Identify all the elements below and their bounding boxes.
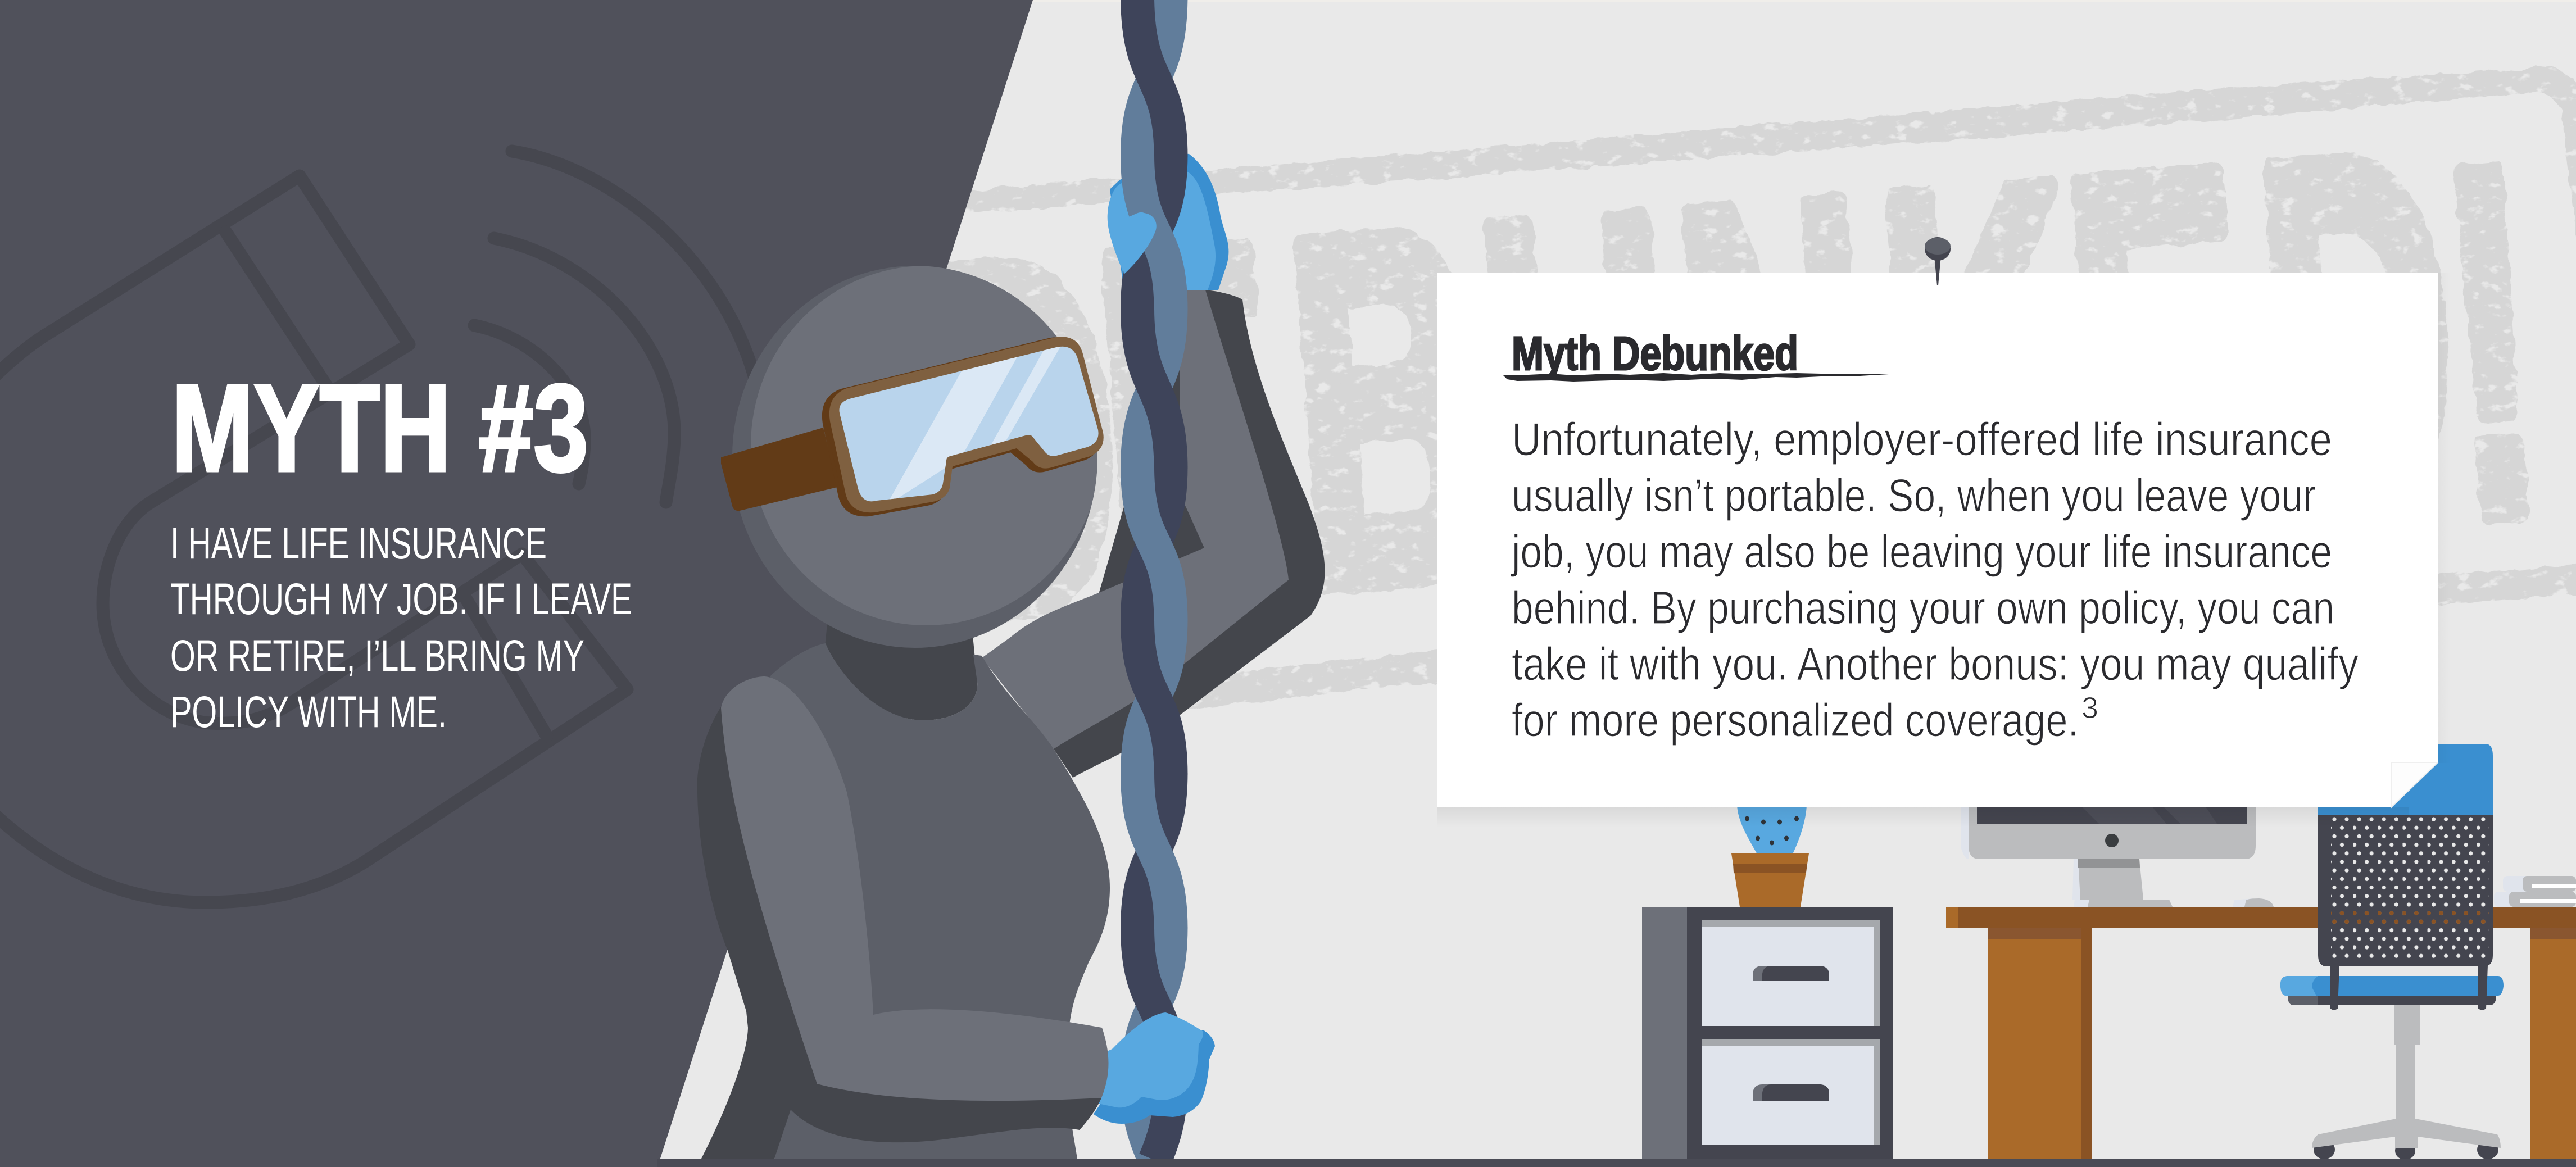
torso	[770, 643, 1110, 1159]
desk	[1946, 907, 2576, 1159]
title: MYTH #3: MYTH #3	[171, 358, 588, 497]
magnet outline icon	[0, 151, 756, 902]
heading: Myth Debunked: Myth Debunked	[1512, 327, 1798, 380]
body text: usually isn’t portable. So, when you leave your	[1512, 469, 2316, 521]
safety goggles	[721, 337, 1104, 515]
body text: take it with you. Another bonus: you may qualify	[1512, 638, 2359, 690]
stacked books	[2494, 876, 2576, 907]
myth statement text: I HAVE LIFE INSURANCE	[170, 518, 547, 568]
body text: for more personalized coverage.	[1512, 694, 2079, 746]
myth statement text: THROUGH MY JOB. IF I LEAVE	[170, 574, 632, 624]
paper fold corner	[2392, 762, 2438, 807]
potted cactus	[1731, 803, 1809, 907]
brush underline	[1503, 373, 1898, 382]
twisted climbing rope	[1137, 0, 1171, 1160]
card shadow	[1437, 273, 2451, 827]
figure neck	[824, 618, 977, 720]
computer monitor	[1961, 787, 2256, 907]
panel: myth debunked card	[1437, 273, 2438, 807]
raised arm	[982, 289, 1325, 778]
body text: behind. By purchasing your own policy, you can	[1512, 582, 2334, 634]
office chair	[2280, 744, 2504, 1160]
upper hand thumb	[1123, 212, 1157, 274]
body text	[1510, 413, 2359, 746]
lower hand on rope	[1094, 1012, 1215, 1124]
file cabinet	[1642, 907, 1893, 1159]
myth statement text: POLICY WITH ME.	[170, 687, 447, 737]
body text: 3	[2081, 691, 2098, 725]
left arm sleeve	[697, 676, 1109, 1159]
push pin	[1925, 237, 1951, 285]
background stamp: DEBUNKED!: DEBUNKED!	[908, 45, 2556, 738]
floor line	[657, 1159, 2576, 1167]
body text: job, you may also be leaving your life insurance	[1510, 525, 2332, 578]
body text: Unfortunately, employer-offered life insurance	[1512, 413, 2332, 465]
dark left panel	[0, 0, 1033, 1167]
myth statement text: OR RETIRE, I’LL BRING MY	[170, 630, 584, 680]
computer mouse	[2233, 898, 2274, 907]
myth statement text	[170, 518, 632, 737]
upper hand behind rope	[1108, 154, 1228, 290]
helmet head	[732, 266, 1101, 648]
